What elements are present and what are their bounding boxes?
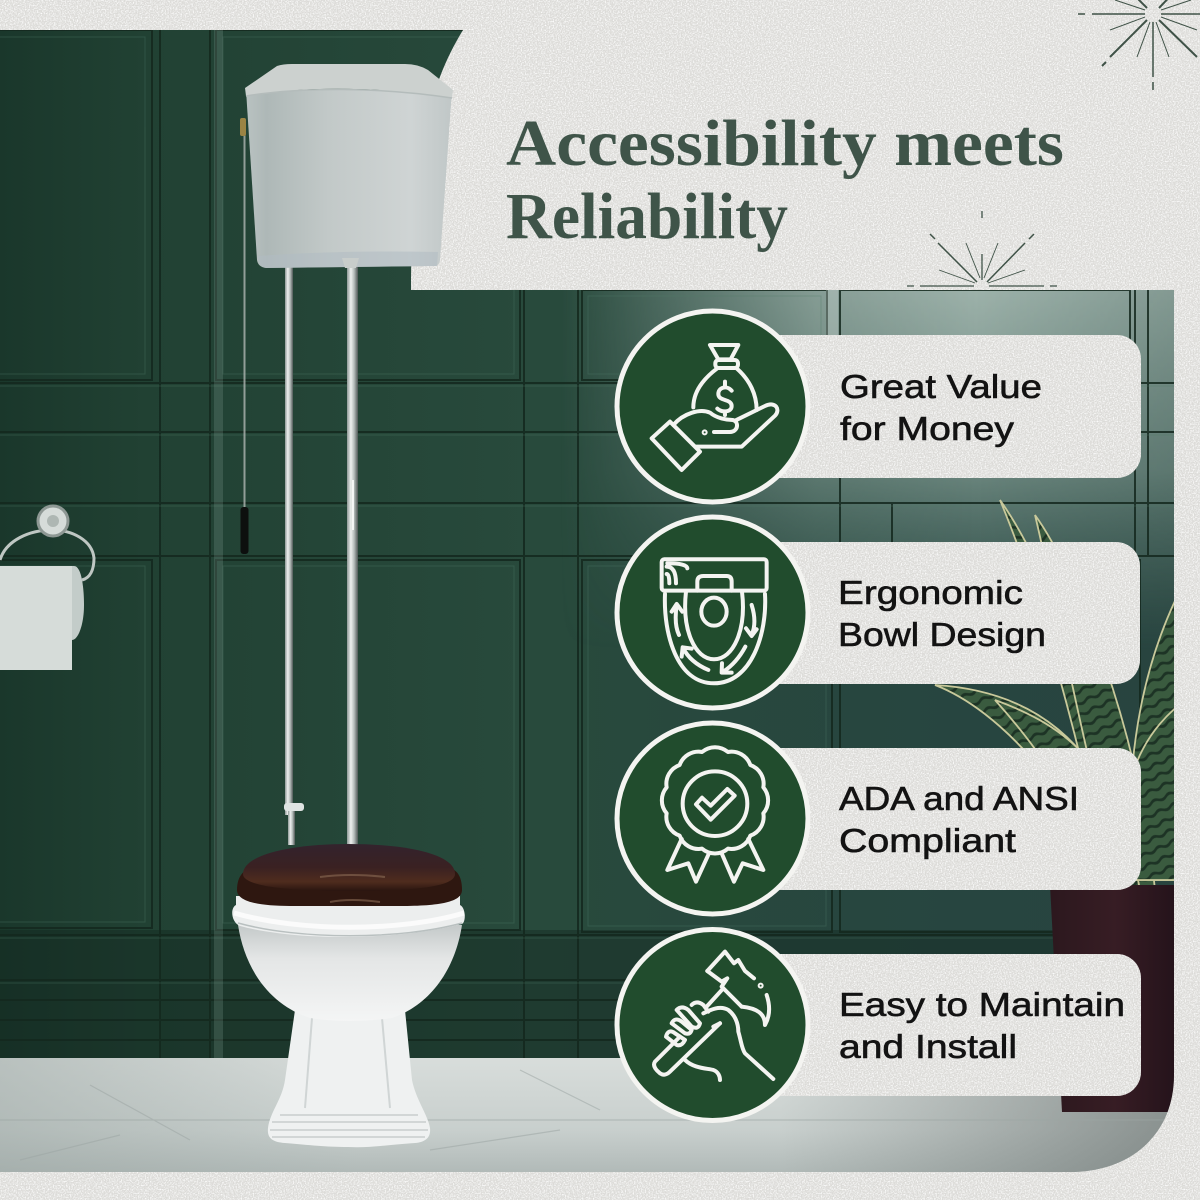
toilet bowl	[232, 896, 465, 1021]
icon badge: certification rosette	[617, 723, 808, 914]
label: Easy to Maintain	[839, 986, 1125, 1023]
icon badge: toilet bowl top view	[617, 517, 808, 708]
icon badge: hand holding hammer	[617, 930, 808, 1120]
snake plant	[934, 500, 1174, 885]
feature pill backgrounds	[700, 335, 1141, 1096]
label: Ergonomic	[838, 574, 1023, 611]
label	[839, 986, 1125, 1065]
feature 4: easy to maintain and install	[617, 930, 1125, 1120]
toilet pedestal	[268, 1010, 430, 1147]
label	[839, 780, 1079, 859]
label: for Money	[840, 410, 1015, 447]
star accent: top right	[1078, 0, 1200, 90]
title: Accessibility meets	[506, 107, 1064, 180]
label: Bowl Design	[838, 616, 1046, 653]
title: Reliability	[506, 180, 788, 253]
feature 1: great value for money	[617, 311, 1042, 502]
wooden toilet seat	[237, 844, 462, 906]
title	[506, 107, 1064, 253]
label: and Install	[839, 1028, 1017, 1065]
label: Great Value	[840, 368, 1042, 405]
icon badge: money bag on hand	[617, 311, 808, 502]
label	[840, 368, 1042, 447]
label: ADA and ANSI	[839, 780, 1079, 817]
right flush pipe	[347, 262, 358, 847]
pull chain and handle	[240, 118, 248, 554]
star accent: above photo	[907, 211, 1057, 286]
label: Compliant	[839, 822, 1016, 859]
feature 3: ada and ansi compliant	[617, 723, 1079, 914]
marble floor	[0, 1058, 1200, 1178]
feature 2: ergonomic bowl design	[617, 517, 1046, 708]
toilet cistern	[245, 64, 453, 268]
left flush pipe	[284, 265, 304, 845]
label	[838, 574, 1046, 653]
toilet paper holder and roll	[0, 506, 94, 670]
plant pot	[1050, 885, 1180, 1112]
